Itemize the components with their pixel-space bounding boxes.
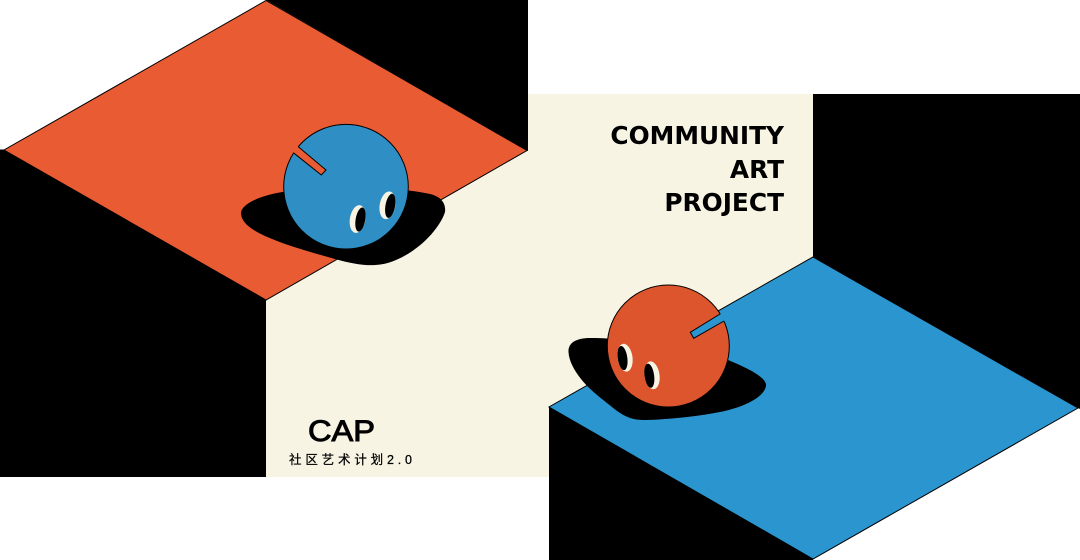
orange notch [291, 145, 326, 175]
blue isometric plane [549, 257, 1078, 559]
blue notch [690, 313, 726, 338]
left eye [616, 343, 634, 373]
title: community art project [610, 121, 785, 217]
title: community art project: COMMUNITY [610, 121, 785, 150]
title: community art project: PROJECT [664, 188, 784, 217]
orange isometric plane [4, 0, 527, 300]
black block: upper left bottom [0, 150, 266, 477]
shadow of blue ball [241, 188, 445, 265]
right eye [377, 190, 398, 220]
logo: CAP: CAP [308, 415, 375, 448]
subtitle: community art plan 2.0: 社区艺术计划2.0 [289, 452, 412, 467]
title: community art project: ART [730, 155, 784, 184]
black block: lower right top [813, 94, 1080, 409]
character: orange ball with shadow [568, 285, 766, 420]
cream background panel [266, 94, 813, 477]
left eye [348, 204, 368, 234]
shadow of orange ball [568, 338, 766, 420]
black block: lower right bottom [549, 407, 813, 560]
black block: upper left top [266, 0, 528, 151]
orange ball body [607, 285, 729, 407]
blue ball body [284, 124, 408, 249]
character: blue ball with shadow [241, 124, 445, 265]
right eye [643, 360, 661, 390]
